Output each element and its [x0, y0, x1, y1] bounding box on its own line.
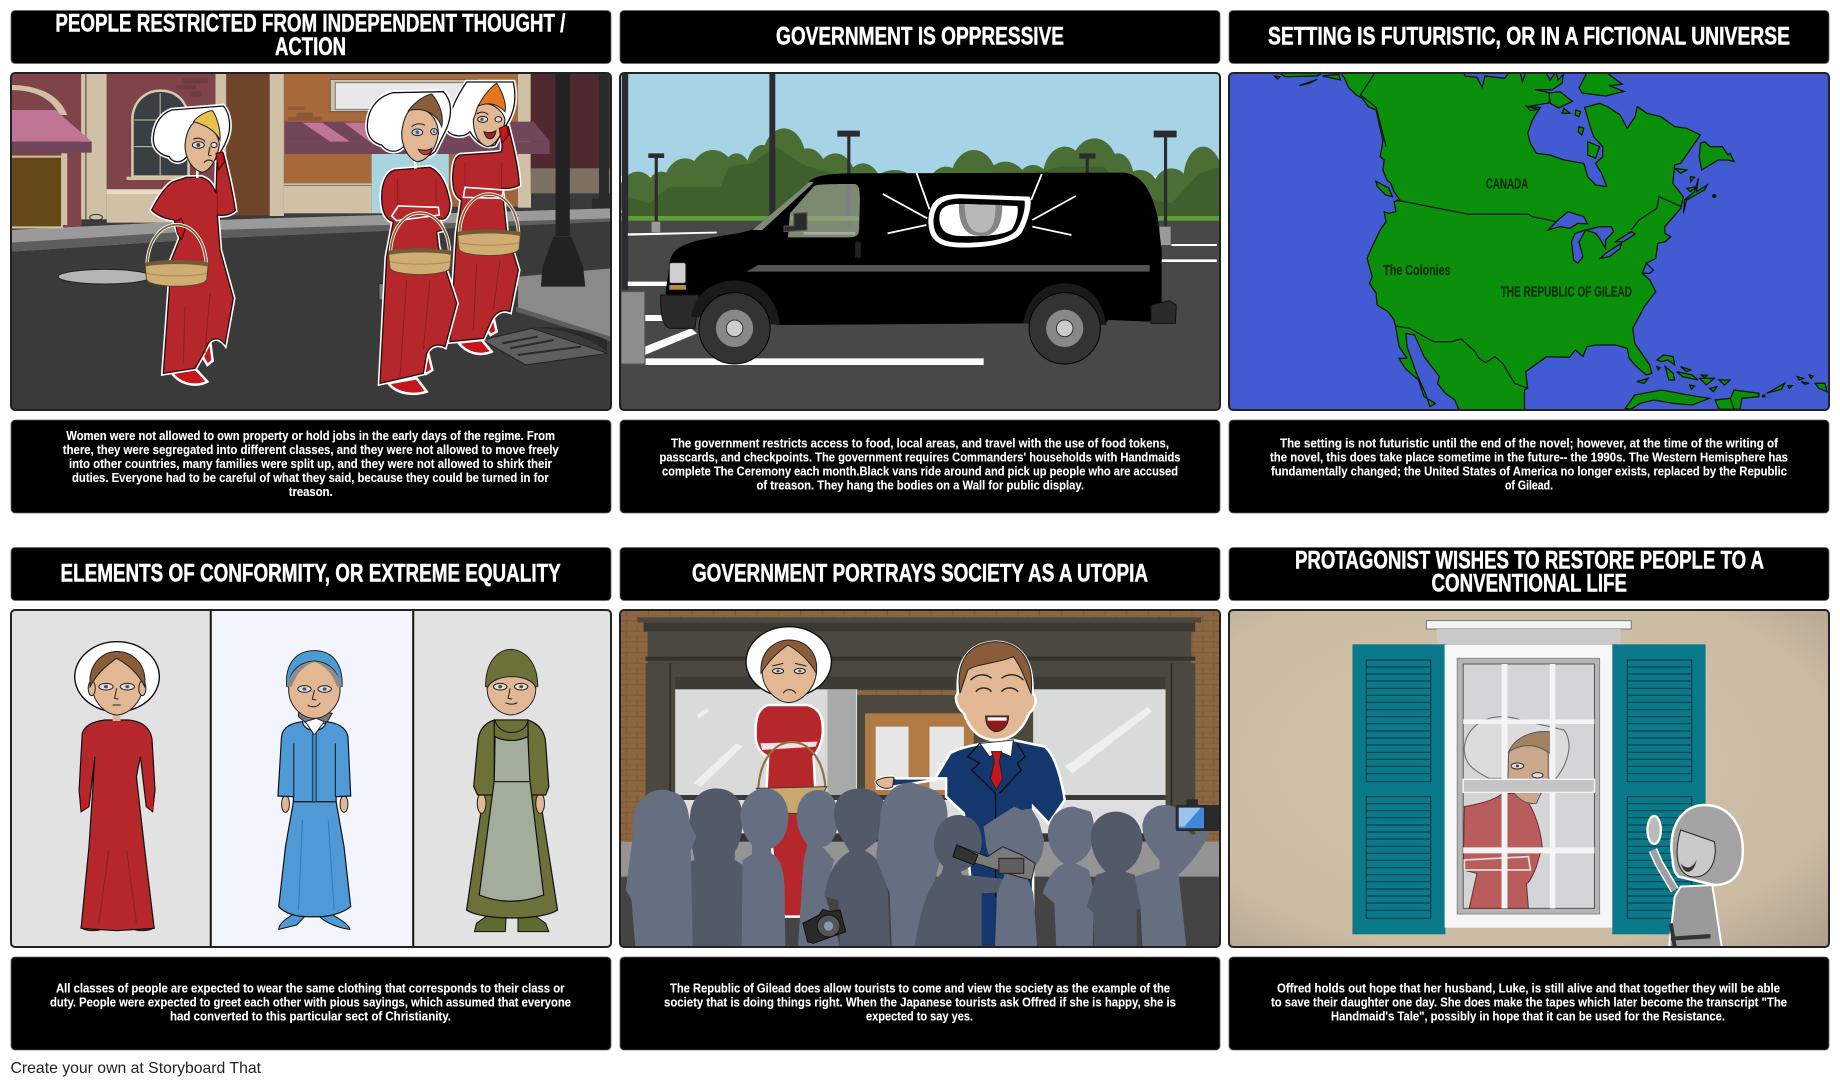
heading 2: GOVERNMENT IS OPPRESSIVE — [776, 23, 1064, 51]
Baffin and arctic islands — [1579, 72, 1624, 96]
caption 5: The Republic of Gilead does allow tourists to come and view the society as the example of the — [670, 980, 1170, 995]
heading 3 — [1229, 10, 1829, 64]
panel 4: conformity — [8, 548, 615, 1050]
frame 1 — [11, 73, 611, 410]
caption 2: The government restricts access to food, local areas, and travel with the use of food tokens, — [671, 436, 1169, 451]
caption 2: complete The Ceremony each month.Black vans ride around and pick up people who are accused — [662, 464, 1178, 479]
lamp posts — [556, 73, 570, 236]
aunt figure — [278, 651, 351, 929]
Caribbean — [1625, 390, 1710, 409]
caption 1: duties. Everyone had to be careful of what they said, because they could be turned in for — [72, 470, 549, 485]
panel 5: utopia — [618, 548, 1223, 1050]
caption 4: had converted to this particular sect of Christianity. — [170, 1008, 451, 1023]
caption 1: treason. — [289, 484, 333, 499]
caption 1 — [11, 420, 611, 513]
mainland — [1339, 70, 1700, 413]
panel 2: oppressive government — [618, 10, 1223, 513]
arctic inlets — [1464, 74, 1565, 89]
handmaid figure — [75, 642, 159, 931]
illustration: three handmaids on a street — [11, 73, 612, 411]
caption 3: The setting is not futuristic until the end of the novel; however, at the time of the writing of — [1280, 436, 1779, 451]
raised blue camera — [1176, 799, 1220, 831]
caption 1: Women were not allowed to own property or hold jobs in the early days of the regime. From — [66, 428, 555, 443]
illustration: three uniforms — [8, 608, 615, 950]
heading 6: CONVENTIONAL LIFE — [1432, 570, 1627, 598]
crowd of tourists — [626, 783, 1209, 947]
heading 1: PEOPLE RESTRICTED FROM INDEPENDENT THOUGHT / — [55, 10, 565, 38]
window muntins — [1463, 664, 1594, 908]
parking lines — [628, 232, 1217, 365]
caption 6: Offred holds out hope that her husband, Luke, is still alive and that together they will be able — [1277, 980, 1780, 995]
van — [665, 173, 1162, 325]
panel 3: fictional setting — [1228, 10, 1831, 513]
caption 1: there, they were segregated into different classes, and they were not allowed to move freely — [63, 442, 559, 457]
illustration: map of North America — [1228, 70, 1831, 414]
wheels — [691, 281, 780, 325]
caption 4: duty. People were expected to greet each other with pious sayings, which assumed that everyone — [50, 994, 571, 1009]
caption 5 — [620, 957, 1220, 1050]
footer credit: Create your own at Storyboard That — [10, 1060, 262, 1077]
caption 2: passcards, and checkpoints. The government requires Commanders' households with Handmaids — [660, 450, 1180, 465]
caption 3 — [1229, 420, 1829, 513]
caption 6 — [1229, 957, 1829, 1050]
caption 4 — [11, 957, 611, 1050]
map label: Republic of Gilead: THE REPUBLIC OF GILEAD — [1501, 285, 1632, 301]
handmaid 2 — [367, 92, 457, 394]
frame 2 — [620, 73, 1220, 410]
panel 1: restricted thought — [11, 10, 612, 513]
caption 2: of treason. They hang the bodies on a Wall for public display. — [756, 478, 1084, 493]
video camera — [953, 845, 1035, 880]
caption 3: of Gilead. — [1505, 478, 1553, 493]
caption 1: into other countries, many families were split up, and they were not allowed to shirk their — [69, 456, 552, 471]
great lakes — [1548, 212, 1588, 230]
handmaid — [746, 627, 831, 917]
heading 4 — [11, 548, 611, 600]
map label: The Colonies: The Colonies — [1383, 263, 1450, 279]
heading 1 — [11, 10, 611, 64]
frame 4 — [11, 610, 611, 947]
caption 5: society that is doing things right. When the Japanese tourists ask Offred if she is happy, she is — [664, 994, 1176, 1009]
borders — [1360, 74, 1734, 409]
illustration: black van with eye logo — [618, 73, 1223, 412]
heading 1: ACTION — [275, 33, 346, 61]
caption 4: All classes of people are expected to wear the same clothing that corresponds to their class or — [56, 980, 564, 995]
light poles — [622, 73, 1177, 290]
caption 5: expected to say yes. — [866, 1008, 973, 1023]
caption 6: Handmaid's Tale", possibly in hope that it can be used for the Resistance. — [1331, 1008, 1725, 1023]
martha figure — [467, 649, 558, 932]
frame 6 — [1229, 610, 1829, 947]
handmaid 3 — [447, 82, 521, 354]
heading 5: GOVERNMENT PORTRAYS SOCIETY AS A UTOPIA — [692, 560, 1148, 588]
heading 4: ELEMENTS OF CONFORMITY, OR EXTREME EQUALITY — [60, 560, 561, 588]
heading 6 — [1229, 546, 1829, 600]
handmaid 1 — [145, 106, 235, 385]
illustration: man, handmaid and tourists at storefront — [618, 608, 1223, 950]
illustration: Offred in the window and child — [1228, 608, 1833, 950]
eye logo — [928, 194, 1031, 247]
tour guide man — [876, 642, 1065, 950]
Offred behind glass — [1463, 717, 1569, 908]
panel 6: protagonist — [1228, 546, 1833, 1050]
frame 5 — [620, 610, 1220, 947]
heading 5 — [620, 548, 1220, 600]
photo camera — [803, 909, 846, 943]
heading 2 — [620, 10, 1220, 64]
map label: Canada: CANADA — [1486, 176, 1529, 192]
child figure in greyscale — [1647, 805, 1743, 950]
frame 3 — [1229, 73, 1829, 410]
caption 2 — [620, 420, 1220, 513]
